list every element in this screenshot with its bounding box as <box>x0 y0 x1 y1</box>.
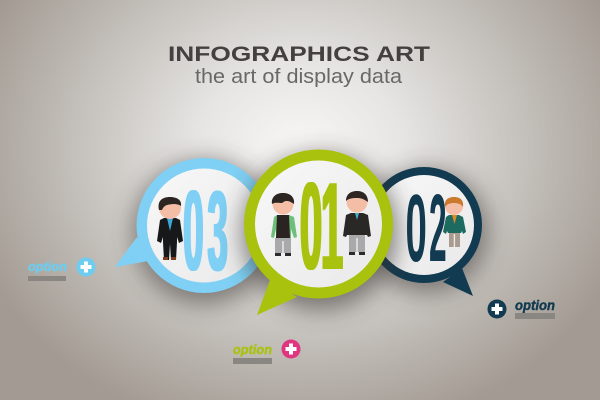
plus icon navy <box>488 300 506 318</box>
number 03: 03 <box>183 166 228 294</box>
subtitle: the art of display data <box>195 65 403 88</box>
panel: bubble 02 <box>364 167 488 296</box>
number 01: 0 <box>300 157 322 296</box>
panel: bubble 01 <box>242 150 398 315</box>
option: navy <box>488 298 555 319</box>
option label navy: option <box>515 298 555 313</box>
caption bar blue <box>28 276 66 281</box>
number 02 <box>406 175 447 282</box>
caption bar pink group <box>233 358 272 364</box>
number 02: 2 <box>429 175 447 282</box>
title: INFOGRAPHICS ART <box>168 42 430 66</box>
person: man in black jacket and grey trousers <box>343 191 371 255</box>
person: boy in teal jacket <box>443 197 466 247</box>
plus icon pink <box>282 340 300 358</box>
option label green: option <box>233 342 272 357</box>
number 01: 1 <box>321 157 343 296</box>
number 01 <box>300 157 343 296</box>
option: blue <box>28 258 96 281</box>
person: man in green jacket and black vest <box>271 193 297 256</box>
plus icon blue <box>76 258 96 276</box>
option: pink <box>233 340 300 364</box>
person: man in black suit with blue tie <box>157 197 183 260</box>
caption bar navy group <box>515 313 555 319</box>
number 02: 0 <box>406 176 427 282</box>
panel: bubble 03 <box>115 158 277 304</box>
option label blue: option <box>28 259 67 274</box>
